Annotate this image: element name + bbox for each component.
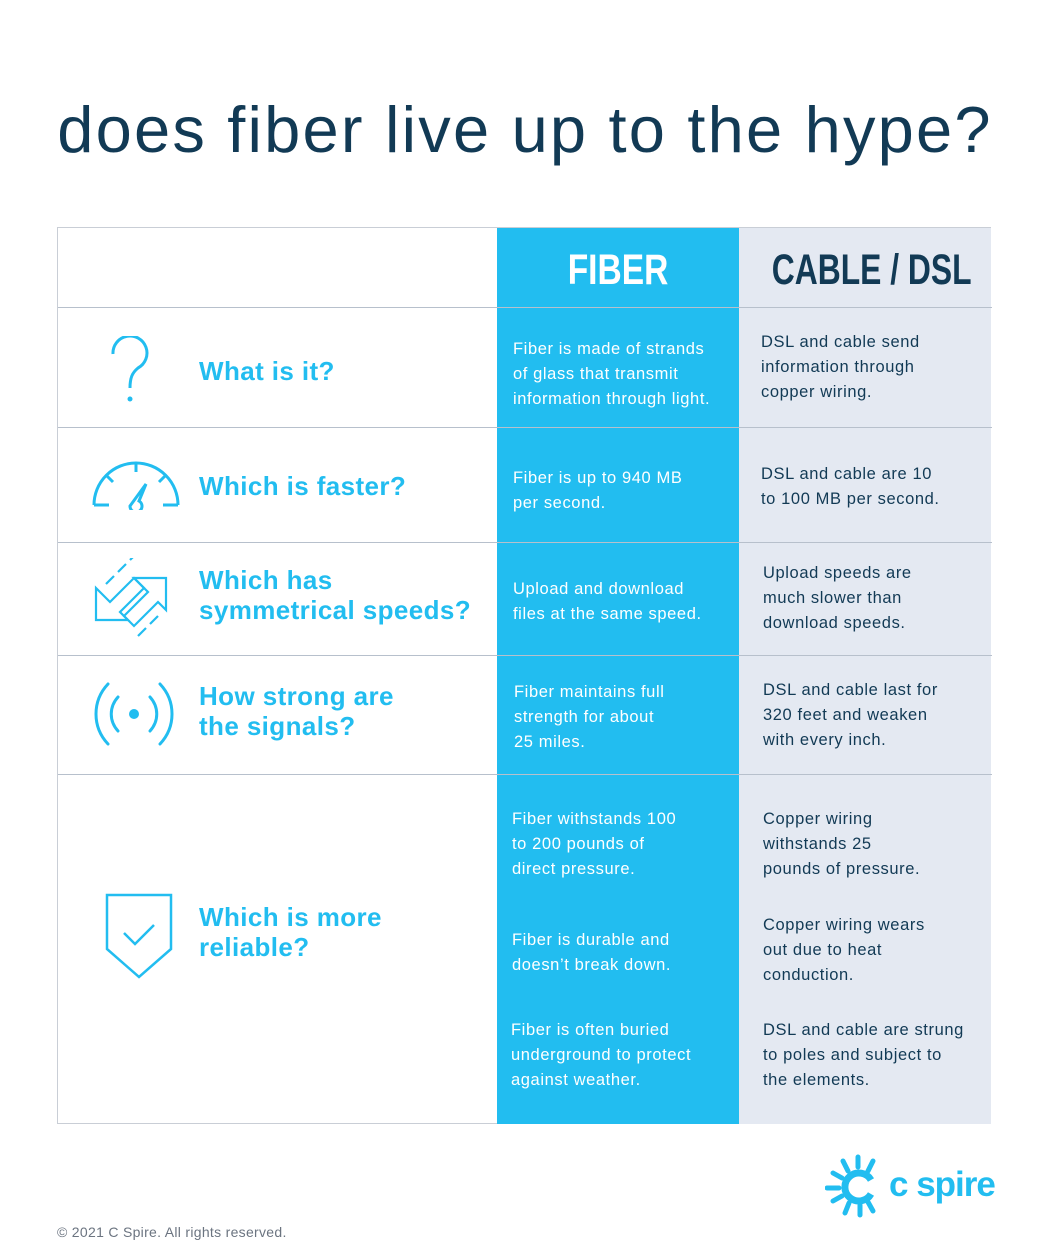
fiber text 1: of glass that transmit bbox=[513, 365, 678, 383]
title: does fiber live up to the hype? bbox=[57, 93, 993, 166]
comparison table bbox=[57, 227, 991, 1124]
cable text 2 bbox=[761, 465, 940, 508]
copyright: © 2021 C Spire. All rights reserved. bbox=[57, 1224, 287, 1240]
cable text 6: Copper wiring wears bbox=[763, 916, 925, 934]
fiber text 1: Fiber is made of strands bbox=[513, 340, 704, 358]
cable text 7 bbox=[763, 1021, 964, 1089]
fiber text 7: Fiber is often buried bbox=[511, 1021, 669, 1039]
question: which is faster: Which is faster? bbox=[199, 471, 406, 501]
fiber text 1: information through light. bbox=[513, 390, 710, 408]
cable text 5 bbox=[763, 810, 920, 878]
header: fiber: FIBER bbox=[568, 246, 668, 294]
question: symmetrical speeds bbox=[199, 565, 471, 625]
question: what is it: What is it? bbox=[199, 356, 335, 386]
cable text 4: DSL and cable last for bbox=[763, 681, 938, 699]
icon: symmetric arrows bbox=[94, 558, 168, 637]
fiber text 6 bbox=[512, 931, 671, 974]
header: cable/dsl: CABLE / DSL bbox=[772, 246, 972, 294]
question: signal strength: the signals? bbox=[199, 711, 356, 741]
icon: question mark bbox=[111, 336, 148, 402]
fiber column bbox=[497, 228, 739, 1124]
cable text 4: with every inch. bbox=[763, 731, 886, 749]
fiber text 3: files at the same speed. bbox=[513, 605, 702, 623]
fiber text 2 bbox=[513, 469, 682, 512]
fiber text 7 bbox=[511, 1021, 691, 1089]
icon: speedometer bbox=[92, 462, 180, 510]
cable text 1: DSL and cable send bbox=[761, 333, 920, 351]
cable text 5: pounds of pressure. bbox=[763, 860, 920, 878]
question: symmetrical speeds: Which has bbox=[199, 565, 333, 595]
cable text 6: out due to heat bbox=[763, 941, 882, 959]
fiber text 7: underground to protect bbox=[511, 1046, 691, 1064]
question: signal strength bbox=[199, 681, 394, 741]
logo: c spire: c spire bbox=[889, 1165, 995, 1204]
cable text 3: download speeds. bbox=[763, 614, 906, 632]
cable text 1: information through bbox=[761, 358, 915, 376]
fiber text 7: against weather. bbox=[511, 1071, 641, 1089]
fiber text 5 bbox=[512, 810, 676, 878]
question: reliability: Which is more bbox=[199, 902, 382, 932]
cable text 4 bbox=[763, 681, 938, 749]
cable text 3: Upload speeds are bbox=[763, 564, 912, 582]
cable text 6: conduction. bbox=[763, 966, 854, 984]
cable text 7: DSL and cable are strung bbox=[763, 1021, 964, 1039]
fiber text 2: per second. bbox=[513, 494, 606, 512]
cable column bbox=[739, 228, 991, 1124]
fiber text 6: Fiber is durable and bbox=[512, 931, 670, 949]
cable text 7: the elements. bbox=[763, 1071, 870, 1089]
fiber text 4: strength for about bbox=[514, 708, 654, 726]
fiber text 5: to 200 pounds of bbox=[512, 835, 645, 853]
fiber text 6: doesn’t break down. bbox=[512, 956, 671, 974]
logo: c spire bbox=[825, 1154, 995, 1218]
cable text 1: copper wiring. bbox=[761, 383, 872, 401]
cable text 7: to poles and subject to bbox=[763, 1046, 942, 1064]
question: reliability bbox=[199, 902, 382, 962]
cable text 5: withstands 25 bbox=[763, 835, 872, 853]
fiber text 5: Fiber withstands 100 bbox=[512, 810, 676, 828]
fiber text 2: Fiber is up to 940 MB bbox=[513, 469, 682, 487]
icon: signal bbox=[94, 682, 174, 746]
fiber text 5: direct pressure. bbox=[512, 860, 635, 878]
cable text 6 bbox=[763, 916, 925, 984]
cable text 2: DSL and cable are 10 bbox=[761, 465, 932, 483]
fiber text 3 bbox=[513, 580, 702, 623]
cable text 1 bbox=[761, 333, 920, 401]
cable text 5: Copper wiring bbox=[763, 810, 873, 828]
cable text 2: to 100 MB per second. bbox=[761, 490, 940, 508]
question: symmetrical speeds: symmetrical speeds? bbox=[199, 595, 471, 625]
cable text 3: much slower than bbox=[763, 589, 902, 607]
question: reliability: reliable? bbox=[199, 932, 310, 962]
fiber text 1 bbox=[513, 340, 710, 408]
fiber text 4 bbox=[514, 683, 664, 751]
question: signal strength: How strong are bbox=[199, 681, 394, 711]
cable text 3 bbox=[763, 564, 912, 632]
fiber text 3: Upload and download bbox=[513, 580, 684, 598]
fiber text 4: Fiber maintains full bbox=[514, 683, 664, 701]
fiber text 4: 25 miles. bbox=[514, 733, 585, 751]
cable text 4: 320 feet and weaken bbox=[763, 706, 928, 724]
icon: shield bbox=[106, 894, 172, 978]
